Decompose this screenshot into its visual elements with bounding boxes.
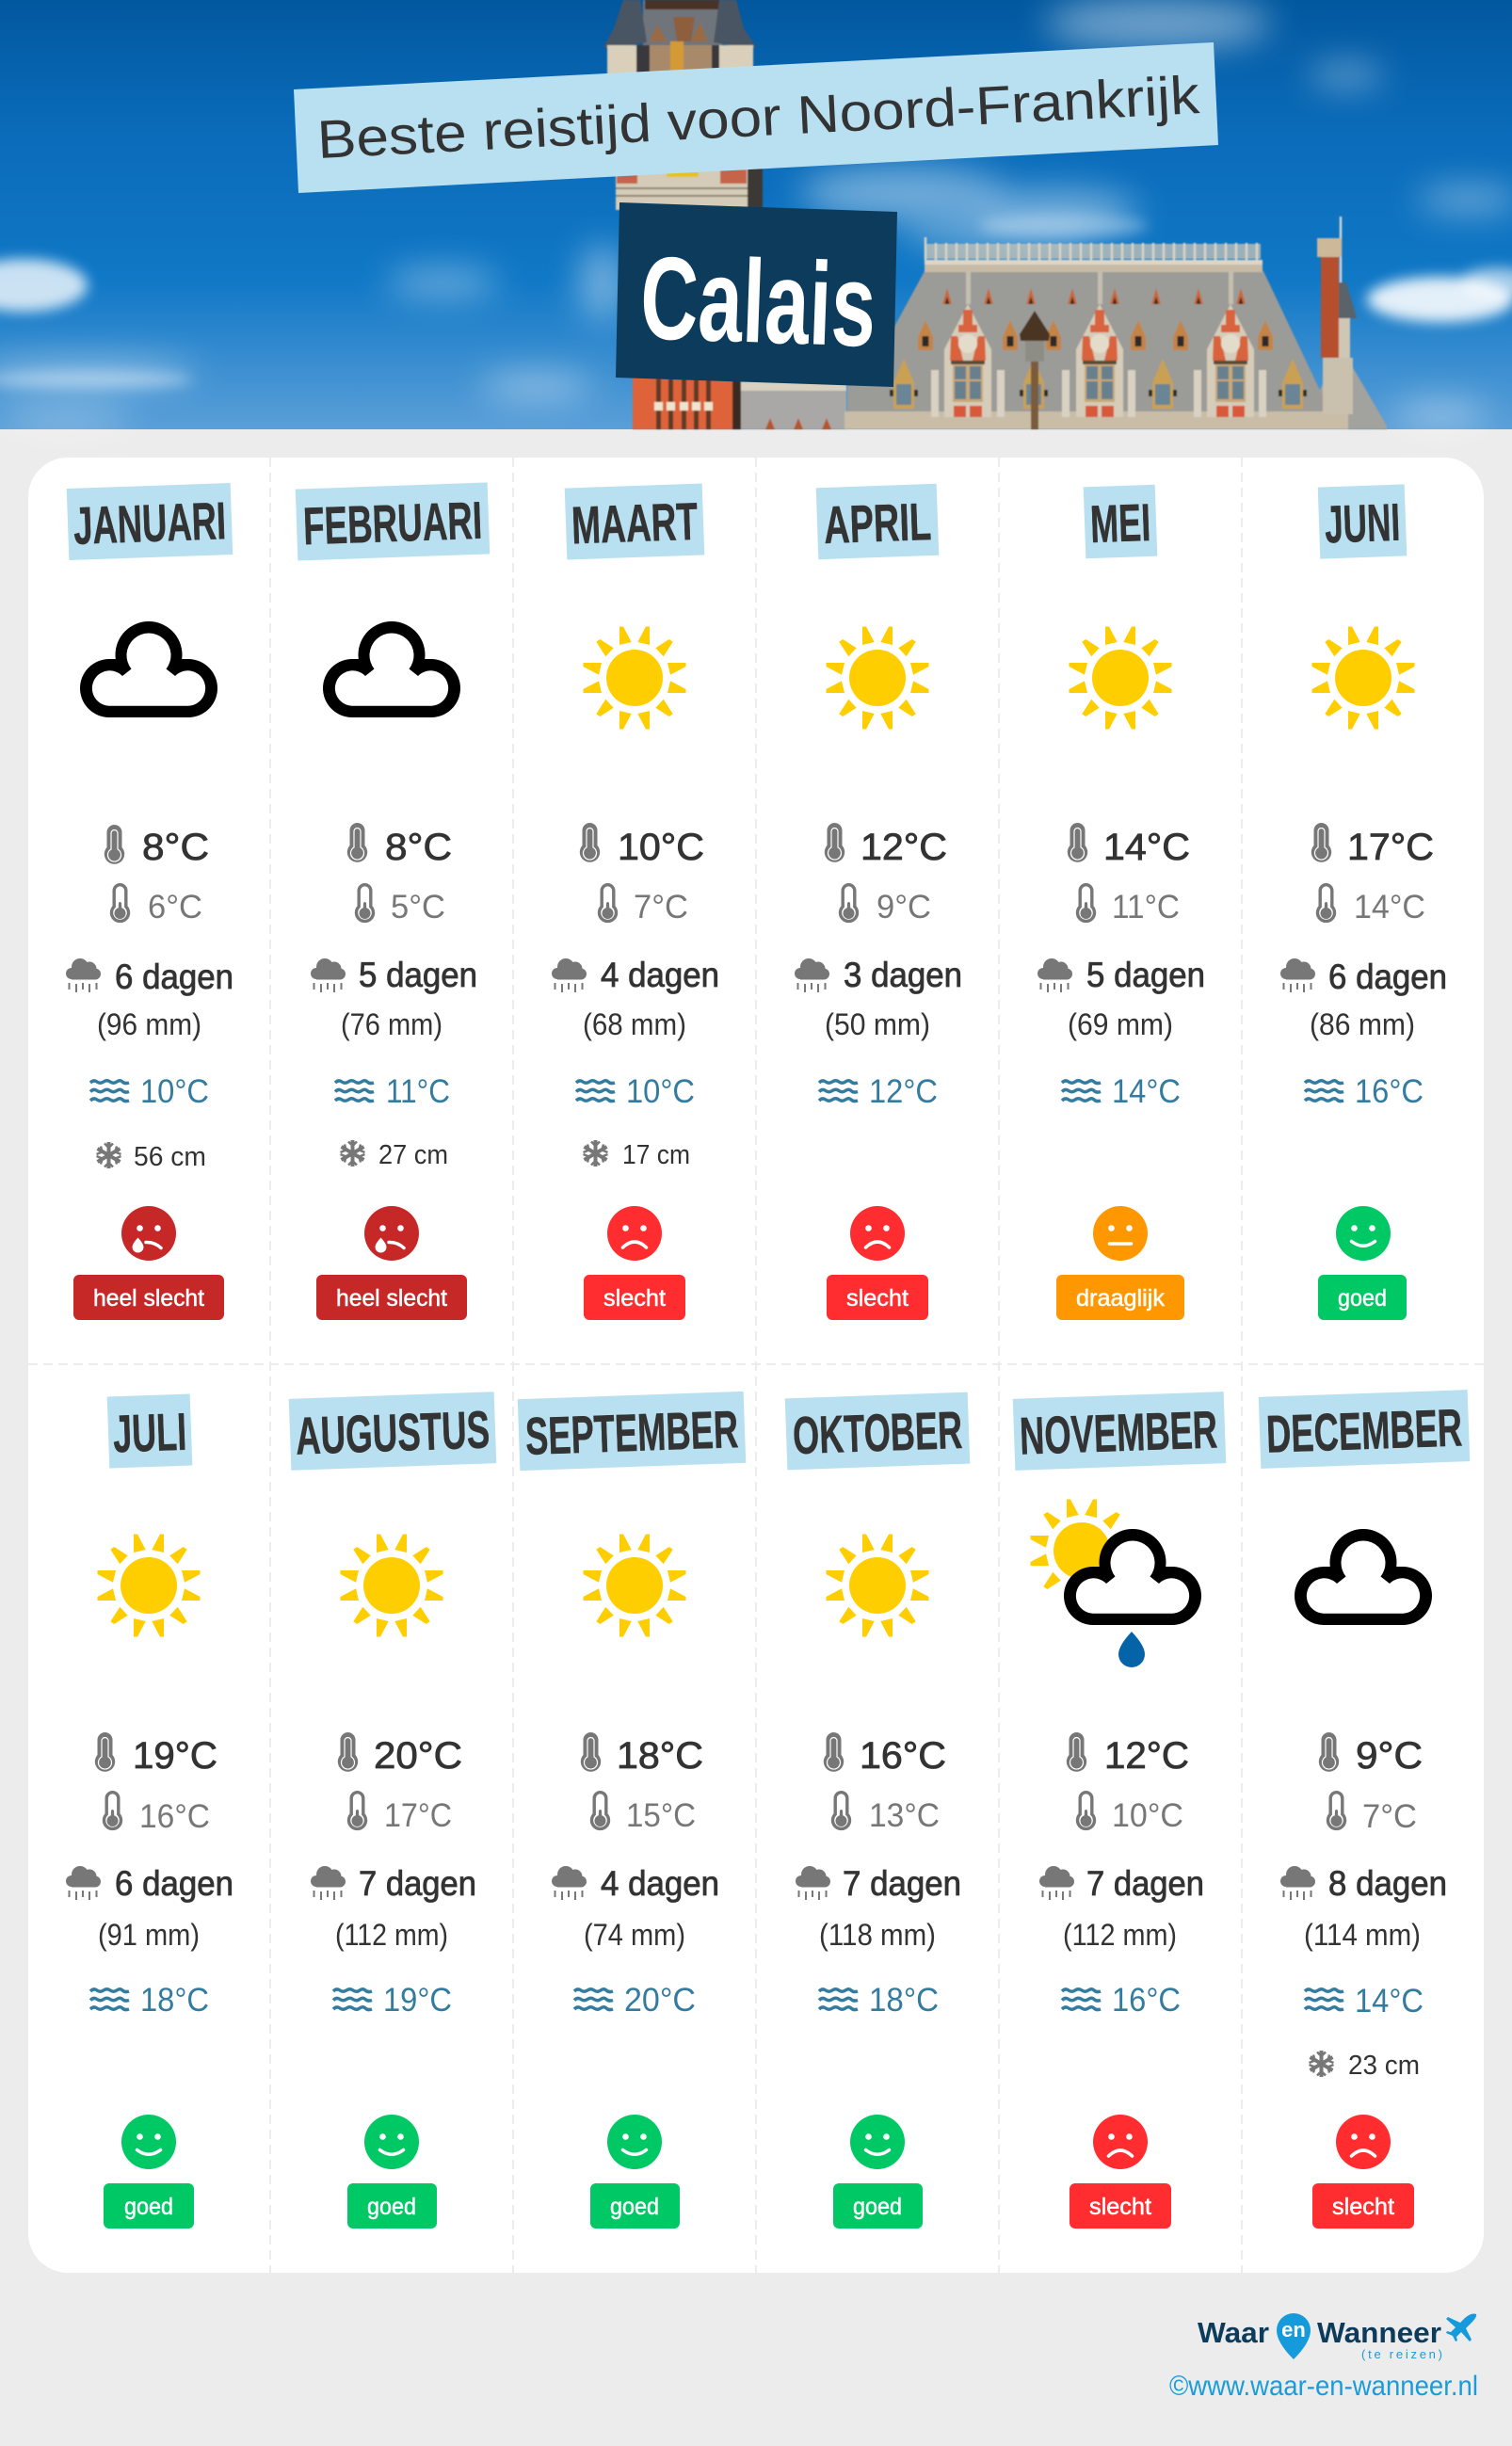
- grid dividers: [28, 458, 1484, 2273]
- month label: juni: JUNI: [1324, 492, 1401, 554]
- balustrade base: [844, 411, 1348, 429]
- min temperature: 13°C: [869, 1797, 940, 1834]
- sea temperature: [1305, 1073, 1424, 1110]
- rating badge: [1056, 1275, 1184, 1320]
- rating face: [121, 2115, 176, 2169]
- rating badge: [316, 1275, 467, 1320]
- sea temperature: 18°C: [869, 1982, 939, 2019]
- rain days: 3 dagen: [844, 956, 962, 994]
- sea temperature: 19°C: [383, 1982, 452, 2019]
- min temperature: 16°C: [139, 1798, 210, 1835]
- month label: oktober: [785, 1392, 970, 1470]
- sea temperature: 16°C: [1355, 1073, 1424, 1110]
- max temperature: 17°C: [1347, 827, 1434, 868]
- max temperature: 8°C: [385, 827, 452, 868]
- rainfall: (112 mm): [335, 1918, 448, 1952]
- city name box: Calais: [638, 233, 878, 372]
- max temperature: 14°C: [1103, 827, 1190, 868]
- rain days: [311, 1864, 476, 1903]
- icon: sun: [827, 1535, 928, 1636]
- rating face: [850, 1206, 905, 1261]
- rain days: 8 dagen: [1328, 1864, 1447, 1903]
- month label: juni: [1318, 484, 1407, 559]
- month label: januari: [67, 483, 233, 560]
- snow: 23 cm: [1348, 2051, 1420, 2081]
- month: juli: [66, 1393, 233, 2229]
- max temperature: 20°C: [374, 1735, 462, 1777]
- sea temperature: [335, 1073, 450, 1110]
- sea temperature: [1305, 1983, 1424, 2020]
- logo: Waar en Wanneer: Waar: [1198, 2316, 1269, 2349]
- max temperature: [825, 823, 947, 868]
- min temperature: [1327, 1793, 1417, 1835]
- rain days: [796, 1864, 961, 1903]
- month: juni: [1280, 484, 1447, 1320]
- min temperature: [1077, 885, 1180, 925]
- rating badge: [584, 1275, 685, 1320]
- rain days: [1037, 956, 1205, 994]
- rain days: 5 dagen: [1086, 956, 1205, 994]
- sea temperature: [574, 1982, 696, 2019]
- rainfall: (96 mm): [97, 1007, 201, 1041]
- icon: sun: [1070, 627, 1171, 729]
- month label: november: [1013, 1392, 1226, 1471]
- min temperature: 9°C: [877, 889, 931, 925]
- tower base: [741, 381, 846, 429]
- rain days: 4 dagen: [601, 1864, 719, 1903]
- title banner: [294, 42, 1218, 193]
- rain days: 7 dagen: [843, 1864, 961, 1903]
- month label: juli: [107, 1393, 192, 1469]
- rating face: [1093, 2115, 1148, 2169]
- min temperature: [1318, 885, 1425, 925]
- min temperature: 5°C: [391, 889, 445, 925]
- rainfall: (91 mm): [98, 1918, 200, 1952]
- max temperature: [581, 1732, 703, 1777]
- rainfall: (76 mm): [341, 1007, 442, 1041]
- month: december: [1259, 1390, 1470, 2229]
- rating badge: [590, 2183, 680, 2229]
- month label: januari: JANUARI: [72, 491, 227, 555]
- icon: sun: [584, 627, 685, 729]
- rating badge: [827, 1275, 928, 1320]
- month: november: [1013, 1392, 1226, 2229]
- sea temperature: 12°C: [869, 1073, 938, 1110]
- rainfall: (86 mm): [1310, 1007, 1415, 1041]
- month: april: [795, 484, 962, 1320]
- max temperature: 9°C: [1356, 1735, 1423, 1777]
- sea temperature: 14°C: [1112, 1073, 1181, 1110]
- month: maart: [552, 483, 719, 1320]
- rating face: [121, 1206, 176, 1261]
- sea temperature: 10°C: [140, 1073, 209, 1110]
- city name box: [616, 202, 897, 387]
- lamp post: [1020, 311, 1050, 341]
- snow: [96, 1142, 206, 1172]
- month label: september: SEPTEMBER: [524, 1399, 739, 1466]
- sea temperature: [576, 1073, 695, 1110]
- rating badge: [73, 1275, 224, 1320]
- rain days: 7 dagen: [1086, 1864, 1204, 1903]
- max temperature: 19°C: [133, 1735, 217, 1777]
- icon: sun: [341, 1535, 442, 1636]
- rainfall: (69 mm): [1068, 1007, 1173, 1041]
- snow: [341, 1140, 448, 1170]
- sea temperature: 11°C: [386, 1073, 450, 1110]
- rating badge: slecht: [1089, 2194, 1151, 2220]
- month label: oktober: OKTOBER: [792, 1400, 963, 1465]
- max temperature: 12°C: [1104, 1735, 1189, 1777]
- sea temperature: 16°C: [1112, 1982, 1181, 2019]
- rain days: [795, 956, 962, 994]
- month: augustus: [289, 1392, 496, 2229]
- rating badge: slecht: [1332, 2194, 1394, 2220]
- min temperature: [104, 1793, 210, 1835]
- rain days: [311, 956, 477, 994]
- month label: maart: [565, 483, 704, 560]
- max temperature: [347, 823, 452, 868]
- town hall roof and facade: [844, 217, 1387, 429]
- rating face: [1093, 1206, 1148, 1261]
- month label: maart: MAART: [571, 491, 699, 555]
- rainfall: (114 mm): [1304, 1918, 1421, 1952]
- rating badge: heel slecht: [93, 1285, 204, 1312]
- month label: augustus: AUGUSTUS: [295, 1399, 491, 1466]
- rainfall: (74 mm): [584, 1918, 685, 1952]
- icon: sun: [1312, 627, 1414, 729]
- rating badge: heel slecht: [336, 1285, 447, 1312]
- website url: ©www.waar-en-wanneer.nl: [1169, 2371, 1478, 2402]
- min temperature: 17°C: [384, 1797, 452, 1834]
- rainfall: (50 mm): [825, 1007, 930, 1041]
- icon: airplane: [1446, 2314, 1476, 2341]
- rating badge: slecht: [603, 1285, 666, 1312]
- sea temperature: 18°C: [140, 1982, 209, 2019]
- rain days: 6 dagen: [1328, 957, 1447, 996]
- logo: Waar en Wanneer: (te reizen): [1361, 2347, 1442, 2361]
- min temperature: [832, 1793, 940, 1834]
- max temperature: [824, 1732, 946, 1777]
- rating badge: goed: [367, 2194, 416, 2220]
- rating badge: goed: [610, 2194, 659, 2220]
- sea temperature: 14°C: [1355, 1983, 1424, 2020]
- logo: Waar en Wanneer: [1198, 2313, 1476, 2361]
- rain days: [1280, 1864, 1447, 1903]
- month label: februari: FEBRUARI: [302, 491, 483, 555]
- rating badge: draaglijk: [1076, 1285, 1165, 1312]
- sea temperature: [333, 1982, 452, 2019]
- rain days: 7 dagen: [359, 1864, 476, 1903]
- rating badge: goed: [1338, 1285, 1387, 1312]
- month: oktober: [785, 1392, 970, 2229]
- max temperature: 8°C: [142, 827, 209, 868]
- rain days: [552, 956, 719, 994]
- month label: april: [816, 484, 939, 559]
- chimney and turret: [1340, 217, 1342, 282]
- rain days: [552, 1864, 719, 1903]
- rain days: 6 dagen: [115, 957, 233, 996]
- max temperature: [1311, 823, 1434, 868]
- rating badge: [347, 2183, 437, 2229]
- panel: white calendar card: [28, 458, 1484, 2273]
- rain days: [66, 957, 233, 996]
- month: mei: [1037, 485, 1205, 1320]
- min temperature: [840, 885, 931, 925]
- min temperature: [111, 885, 202, 925]
- icon: cloud: [323, 621, 460, 717]
- snow: 17 cm: [622, 1140, 690, 1170]
- rating badge: [104, 2183, 194, 2229]
- logo: Waar en Wanneer: Wanneer: [1317, 2316, 1441, 2349]
- rating face: [1336, 2115, 1391, 2169]
- snow: [1309, 2051, 1420, 2081]
- max temperature: 12°C: [861, 827, 947, 868]
- month label: november: NOVEMBER: [1019, 1399, 1218, 1466]
- max temperature: [1068, 823, 1190, 868]
- rainfall: (112 mm): [1063, 1918, 1177, 1952]
- icon: sun: [584, 1535, 685, 1636]
- rating face: [850, 2115, 905, 2169]
- month label: februari: [296, 482, 490, 561]
- icon: sun: [827, 627, 928, 729]
- min temperature: [591, 1793, 696, 1834]
- rating badge: [1318, 1275, 1407, 1320]
- rating badge: goed: [853, 2194, 902, 2220]
- month label: april: APRIL: [823, 491, 932, 555]
- rating badge: [1070, 2183, 1171, 2229]
- max temperature: [338, 1732, 462, 1777]
- min temperature: 15°C: [626, 1797, 696, 1834]
- min temperature: [356, 885, 445, 925]
- icon: sun: [98, 1535, 200, 1636]
- snow: [584, 1140, 690, 1170]
- min temperature: 7°C: [1362, 1798, 1417, 1835]
- max temperature: 16°C: [860, 1735, 946, 1777]
- max temperature: [1319, 1732, 1423, 1777]
- title banner: Beste reistijd voor Noord-Frankrijk: [315, 65, 1201, 170]
- max temperature: 18°C: [617, 1735, 703, 1777]
- min temperature: [1077, 1793, 1183, 1834]
- min temperature: [599, 885, 688, 925]
- max temperature: [1067, 1732, 1189, 1777]
- min temperature: 11°C: [1112, 889, 1180, 925]
- rating face: [364, 1206, 419, 1261]
- sea temperature: 10°C: [626, 1073, 695, 1110]
- icon: sun, cloud and rain drop: [1030, 1499, 1201, 1667]
- rain days: [1280, 957, 1447, 996]
- max temperature: 10°C: [618, 827, 704, 868]
- rain days: 4 dagen: [601, 956, 719, 994]
- icon: cloud: [80, 621, 217, 717]
- dormers: [942, 288, 952, 304]
- rating face: [1336, 1206, 1391, 1261]
- min temperature: 7°C: [634, 889, 688, 925]
- sea temperature: [90, 1982, 209, 2019]
- rating badge: [833, 2183, 923, 2229]
- belfry tower: [603, 0, 846, 429]
- rating badge: goed: [124, 2194, 173, 2220]
- sea temperature: [819, 1982, 939, 2019]
- min temperature: 10°C: [1112, 1797, 1183, 1834]
- rating face: [607, 1206, 662, 1261]
- snow: 27 cm: [378, 1140, 448, 1170]
- sea temperature: [1062, 1982, 1181, 2019]
- rain days: 5 dagen: [359, 956, 477, 994]
- month: februari: [296, 482, 490, 1320]
- max temperature: [580, 823, 704, 868]
- rain days: [66, 1864, 233, 1903]
- rainfall: (118 mm): [819, 1918, 936, 1952]
- rating badge: slecht: [846, 1285, 909, 1312]
- rating face: [364, 2115, 419, 2169]
- balustrade finials: [925, 237, 1257, 260]
- min temperature: 6°C: [148, 889, 202, 925]
- sea temperature: [819, 1073, 938, 1110]
- rain days: [1039, 1864, 1204, 1903]
- rain days: 6 dagen: [115, 1864, 233, 1903]
- tower top: [643, 0, 722, 75]
- month label: mei: [1084, 485, 1157, 558]
- sky clouds: [0, 0, 1512, 428]
- month label: september: [518, 1392, 746, 1471]
- max temperature: [105, 825, 209, 868]
- rating face: [607, 2115, 662, 2169]
- month: september: [518, 1392, 746, 2229]
- snow: 56 cm: [134, 1142, 206, 1172]
- month label: juli: JULI: [112, 1402, 187, 1463]
- rainfall: (68 mm): [583, 1007, 686, 1041]
- icon: cloud: [1295, 1529, 1432, 1625]
- month label: mei: MEI: [1089, 492, 1151, 554]
- month: januari: [66, 483, 233, 1320]
- sea temperature: [90, 1073, 209, 1110]
- sea temperature: 20°C: [624, 1982, 696, 2019]
- rating badge: [1312, 2183, 1414, 2229]
- max temperature: [95, 1732, 217, 1777]
- month label: augustus: [289, 1392, 496, 1471]
- min temperature: [348, 1793, 452, 1834]
- min temperature: 14°C: [1354, 889, 1425, 925]
- sea temperature: [1062, 1073, 1181, 1110]
- icon: location pin: en: [1281, 2318, 1306, 2341]
- tower middle: [747, 168, 763, 210]
- icon: location pin: [1277, 2313, 1311, 2359]
- hero photo: sky and Calais town hall: [0, 0, 1512, 429]
